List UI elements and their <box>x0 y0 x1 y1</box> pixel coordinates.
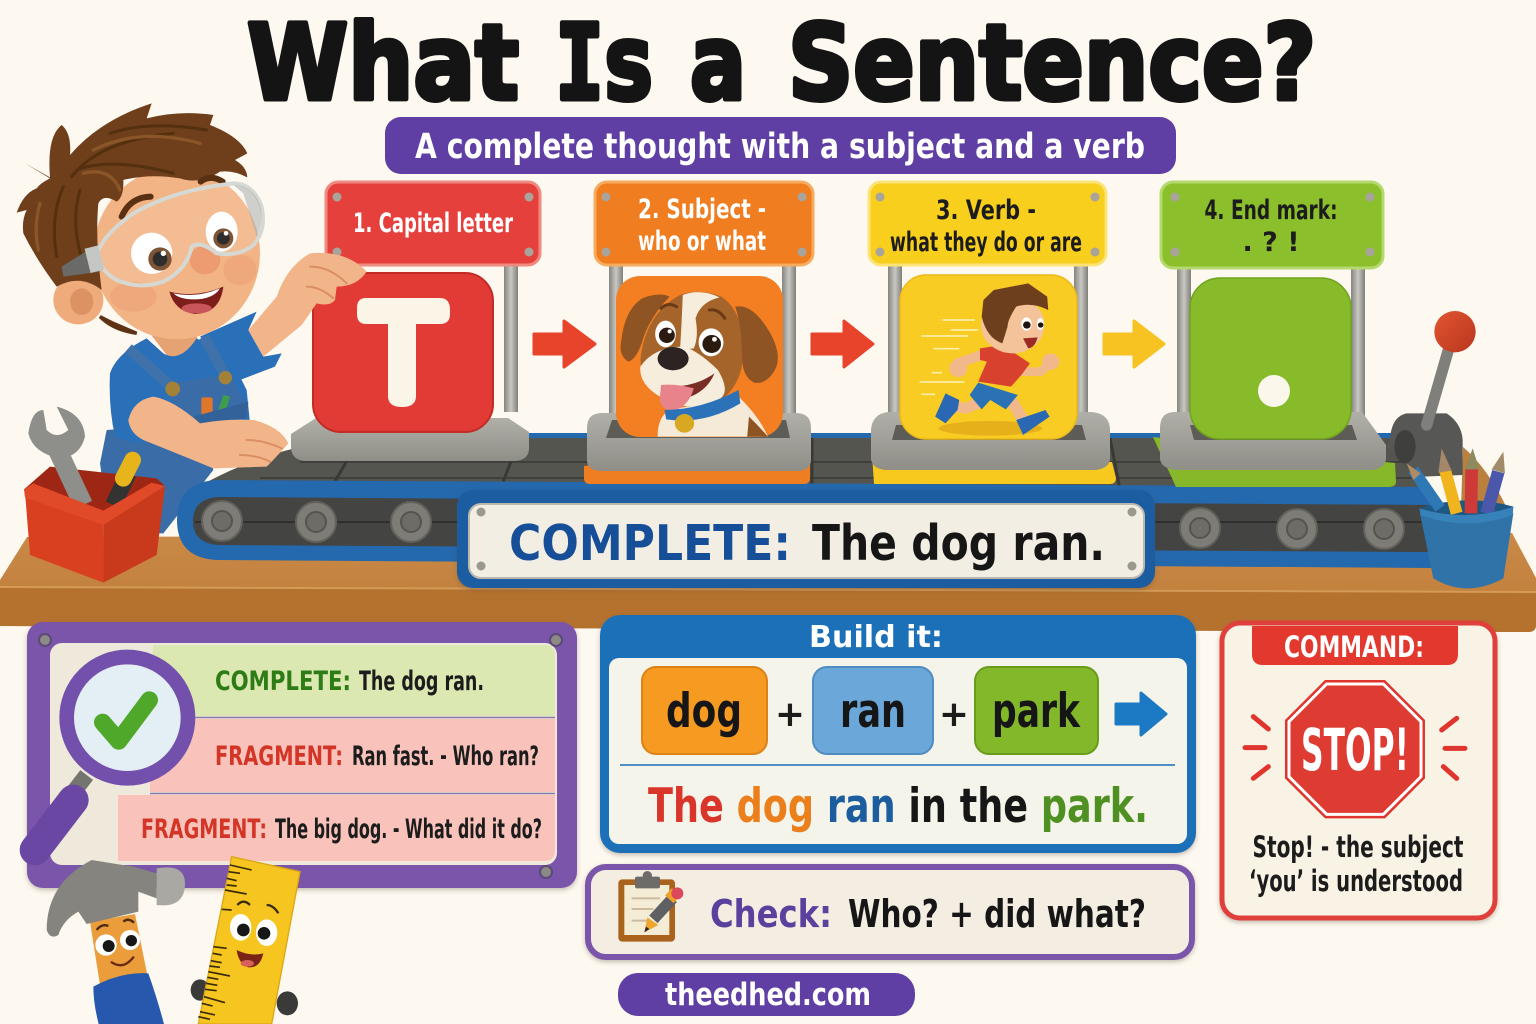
tile: park: park <box>992 684 1081 739</box>
panel: build it <box>600 615 1196 853</box>
title: Sentence? <box>788 2 1316 124</box>
overalls bib <box>165 373 248 427</box>
complete sentence plate: The dog ran. <box>812 515 1105 572</box>
period dot <box>1258 375 1290 407</box>
boy: body and head <box>17 103 282 533</box>
tile: ran: ran <box>840 684 906 739</box>
built sentence: The dog ran in the park. <box>648 779 1148 834</box>
station 1: capital letter <box>291 182 540 461</box>
tile: park <box>975 667 1098 754</box>
neck <box>150 333 198 358</box>
station 3: verb <box>869 182 1116 484</box>
rollers <box>202 501 1404 549</box>
station 1: capital letter: 1. Capital letter <box>353 208 513 239</box>
icon: stop sign <box>1245 680 1465 818</box>
complete sentence plate: COMPLETE: <box>509 515 791 572</box>
heading <box>1252 626 1458 665</box>
station 2: subject: 2. Subject - <box>638 194 766 225</box>
panel: check <box>588 867 1192 957</box>
panel: command: STOP! <box>1301 716 1409 784</box>
ear <box>53 276 103 324</box>
arrow 2 <box>812 321 873 367</box>
station 4: end mark: . ? ! <box>1242 227 1300 258</box>
panel: build it: + <box>939 694 969 735</box>
eyebrows <box>122 178 223 217</box>
row: complete: The dog ran. <box>359 666 484 697</box>
boy: arms and hands <box>128 253 367 468</box>
letter T block <box>357 298 450 407</box>
row: fragment what: The big dog. - What did it do? <box>275 814 542 845</box>
pencil cup <box>1407 448 1513 588</box>
row: fragment who: FRAGMENT: <box>215 741 343 772</box>
row: complete <box>153 645 555 716</box>
heading: Build it: <box>809 620 943 655</box>
hair <box>17 103 247 290</box>
arrow <box>1116 693 1166 735</box>
icon: ruler character <box>191 857 300 1024</box>
panel: command: COMMAND: <box>1284 630 1424 664</box>
panel: sentence check <box>27 622 577 888</box>
title <box>247 2 1316 124</box>
website badge: theedhed.com <box>665 977 871 1013</box>
row: complete: COMPLETE: <box>215 666 351 697</box>
arrow 1 <box>534 321 595 367</box>
row: fragment what: FRAGMENT: <box>141 814 267 845</box>
tile: ran <box>813 667 933 754</box>
station 2: subject <box>584 182 813 484</box>
title: What <box>247 2 519 124</box>
goggles <box>62 250 100 277</box>
marker <box>113 473 128 505</box>
row: fragment what <box>118 795 555 861</box>
box interior <box>24 467 165 523</box>
mouth <box>169 287 223 314</box>
panel: check: Who? + did what? <box>848 892 1146 936</box>
row: fragment who <box>150 719 555 792</box>
station 4: end mark: 4. End mark: <box>1204 195 1338 226</box>
panel: check: Check: <box>710 892 832 936</box>
tile: dog: dog <box>666 684 742 739</box>
tile: dog <box>642 667 767 754</box>
bolts <box>39 634 562 878</box>
row: fragment who: Ran fast. - Who ran? <box>352 741 539 772</box>
subtitle banner: A complete thought with a subject and a verb <box>415 127 1145 167</box>
icon: hammer character <box>47 860 185 1024</box>
station 3: verb: 3. Verb - <box>936 195 1036 226</box>
station 2: subject: who or what <box>638 226 766 257</box>
nose <box>190 246 220 274</box>
icon: running boy <box>920 283 1059 436</box>
tool box <box>24 407 165 583</box>
overalls lower <box>100 423 213 533</box>
panel: build it: + <box>775 694 805 735</box>
wrench <box>58 452 83 505</box>
title: a <box>690 2 746 124</box>
arrow 3 <box>1104 321 1164 367</box>
face <box>93 167 260 339</box>
station 4: end mark <box>1153 182 1396 487</box>
eyes <box>131 233 172 274</box>
icon: dog <box>621 292 778 437</box>
lever <box>1387 311 1476 477</box>
wooden workbench <box>0 447 1536 632</box>
station 3: verb: what they do or are <box>890 227 1082 258</box>
panel: command <box>1222 623 1495 918</box>
conveyor belt <box>177 433 1432 568</box>
shirt <box>110 338 250 443</box>
complete sentence plate <box>457 490 1155 588</box>
icon: magnifying glass <box>35 657 188 850</box>
title: Is <box>555 2 653 124</box>
subtitle banner <box>385 117 1176 174</box>
icon: clipboard <box>618 871 683 942</box>
